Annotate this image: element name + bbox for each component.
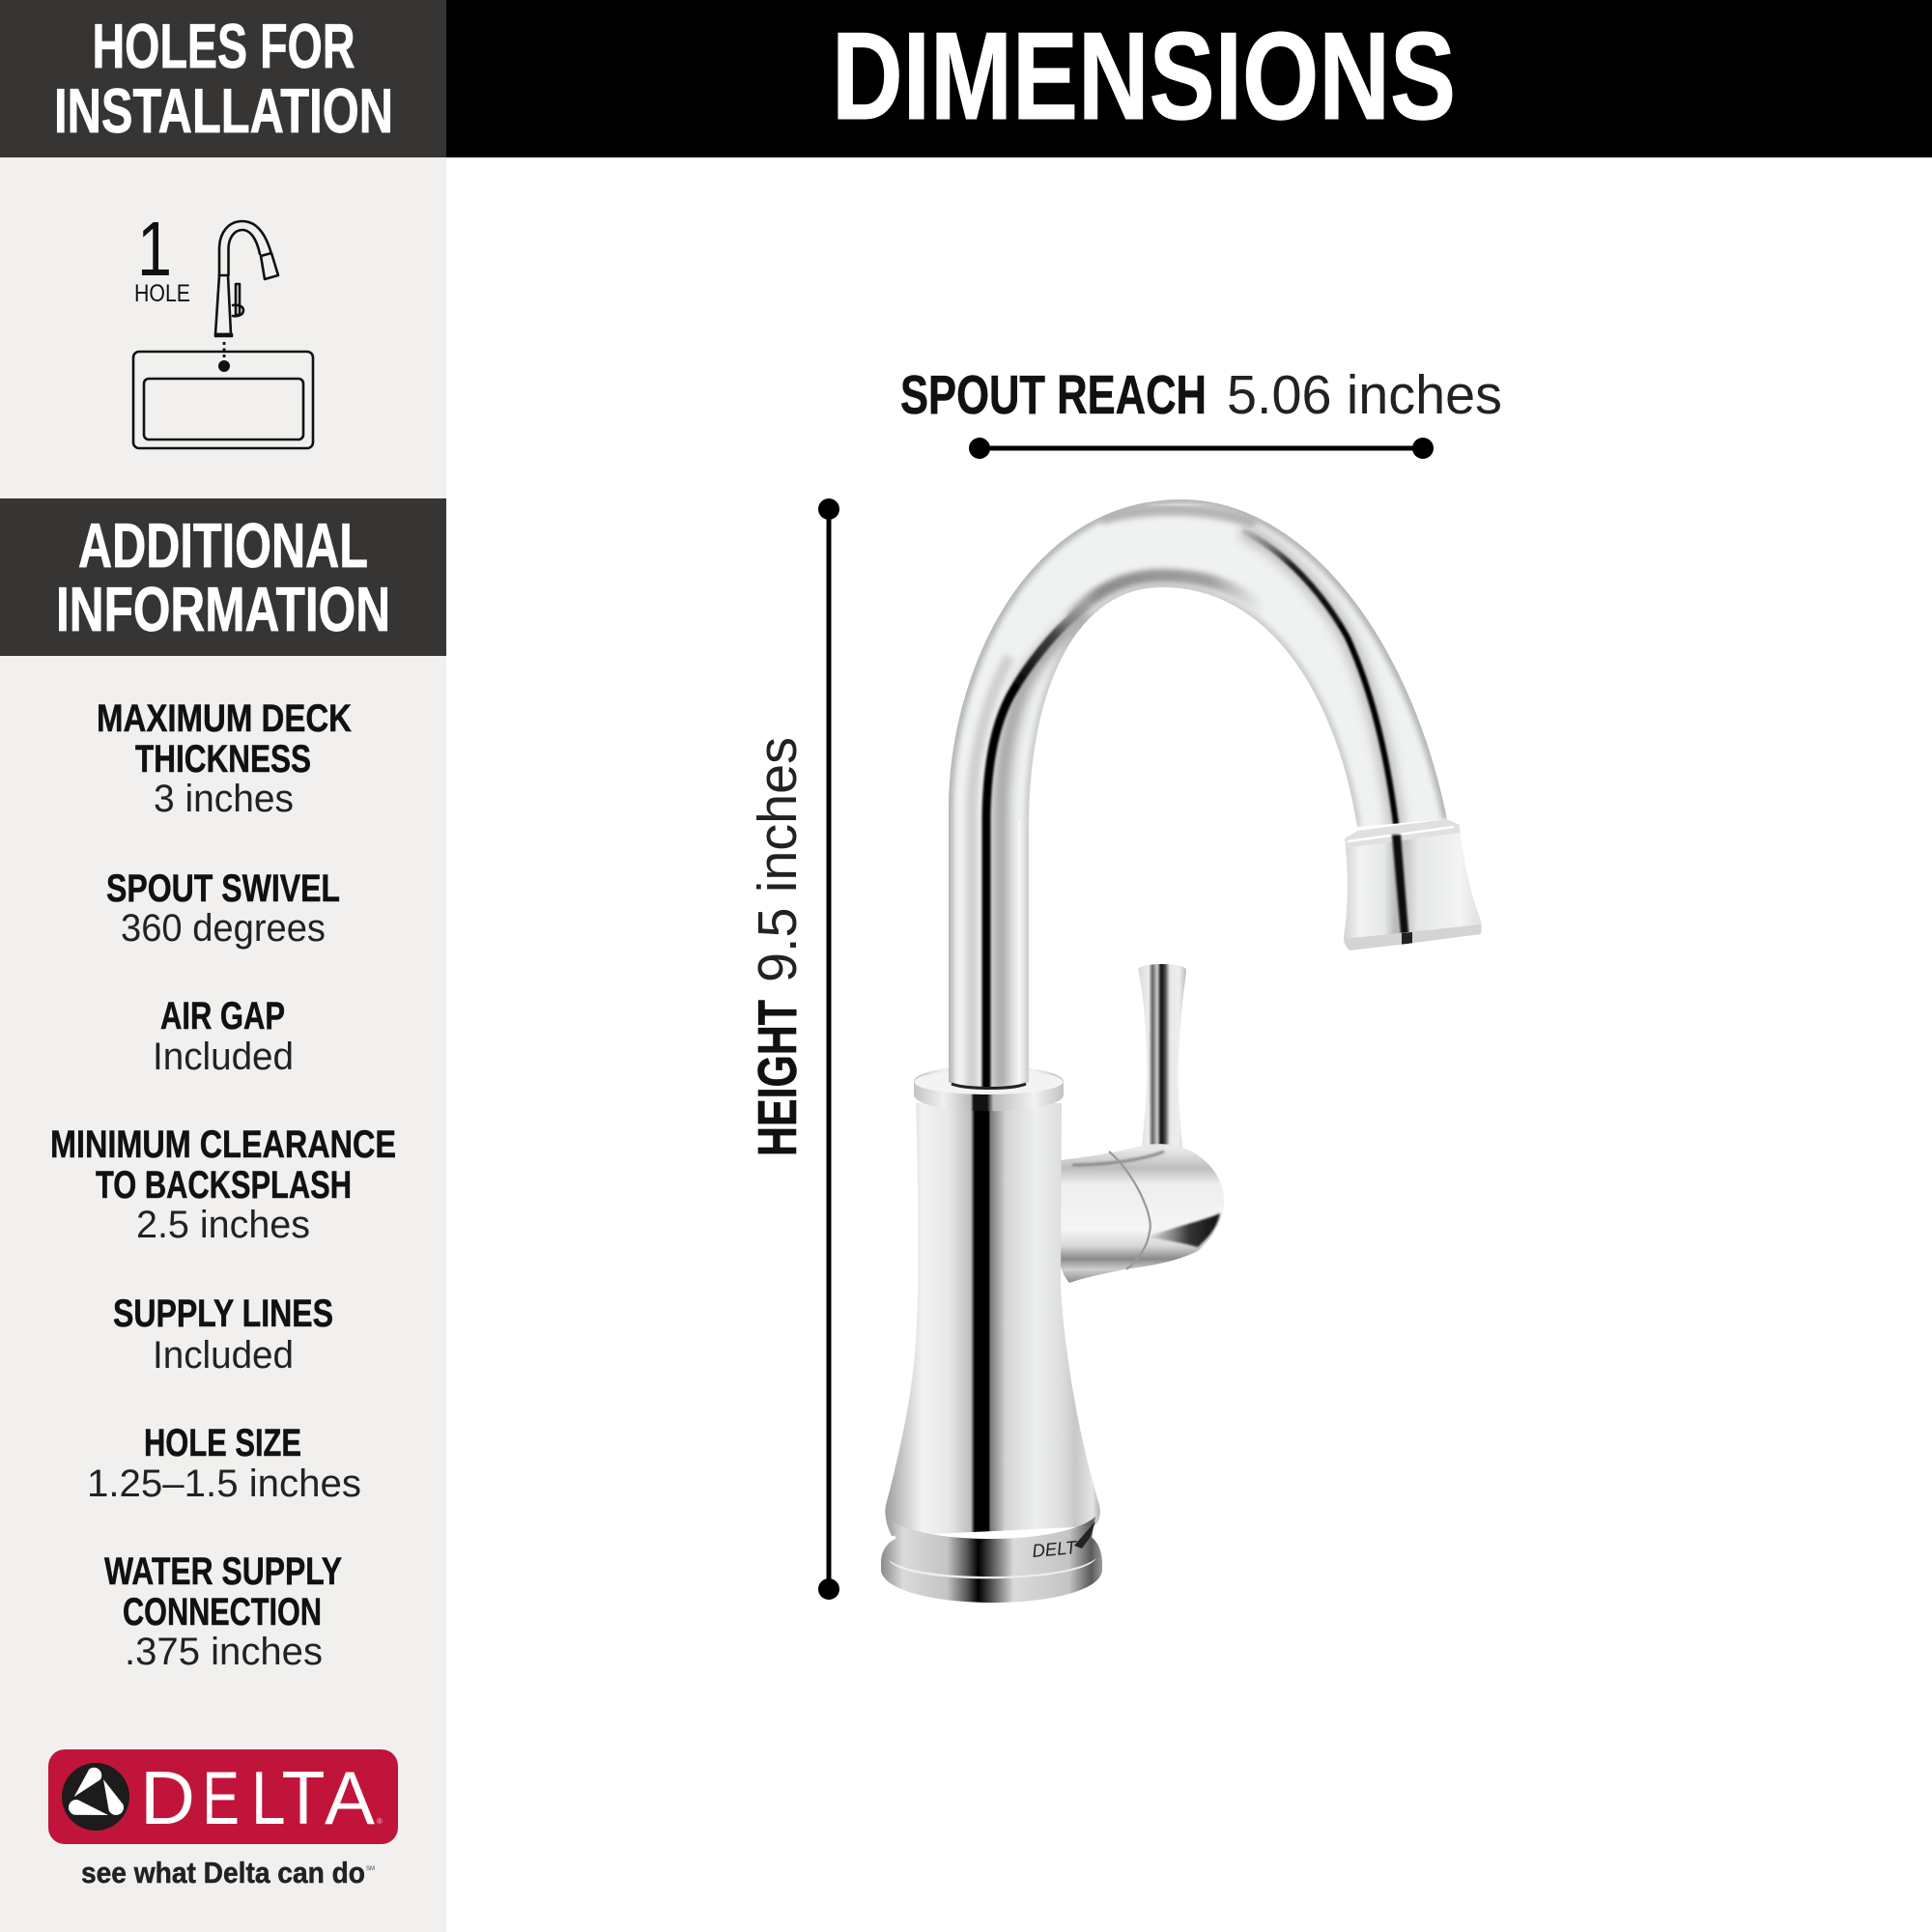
label: height: 9.5 inches <box>747 737 809 982</box>
faucet: lever handle <box>1138 964 1186 1150</box>
text block: minimum clearance to backsplash <box>50 1123 396 1246</box>
faucet: base plate <box>881 1536 1102 1603</box>
logo: delta <box>48 1749 398 1889</box>
heading: holes for installation: INSTALLATION <box>54 75 393 146</box>
text block: supply lines <box>113 1293 333 1377</box>
text block: minimum clearance to backsplash: TO BACKSPLASH <box>96 1164 352 1207</box>
icon: sink outline <box>133 352 313 448</box>
faucet: collar ring <box>914 1066 1064 1111</box>
text block: hole size: HOLE SIZE <box>144 1422 301 1464</box>
text block: spout swivel: SPOUT SWIVEL <box>106 867 340 910</box>
faucet: lever body <box>1057 1144 1224 1283</box>
icon: one hole faucet and sink <box>133 206 313 448</box>
text: service mark: SM <box>366 1866 375 1872</box>
logo: wordmark: L <box>251 1755 286 1840</box>
text block: air gap <box>153 995 294 1078</box>
logo: wordmark: E <box>202 1755 240 1840</box>
text block: minimum clearance to backsplash: 2.5 inches <box>136 1204 310 1246</box>
text: tagline: see what Delta can do <box>81 1856 365 1889</box>
text block: air gap: Included <box>153 1036 294 1078</box>
panel: left sidebar background <box>0 0 446 1932</box>
heading: holes for installation: HOLES FOR <box>93 11 355 81</box>
logo: wordmark <box>140 1755 375 1840</box>
logo: red plate <box>48 1749 398 1844</box>
logo: wordmark: A <box>325 1755 375 1840</box>
text block: maximum deck thickness: MAXIMUM DECK <box>97 697 352 740</box>
text block: supply lines: Included <box>153 1334 294 1377</box>
arrow: height dimension line <box>818 498 839 1600</box>
text block: minimum clearance to backsplash: MINIMUM CLEARANCE <box>50 1123 396 1166</box>
icon: small faucet outline <box>215 221 278 336</box>
text block: hole size <box>87 1422 361 1505</box>
text block: water supply connection <box>104 1550 342 1673</box>
label: spout reach: SPOUT REACH <box>900 364 1207 426</box>
label: spout reach: 5.06 inches <box>1227 364 1502 426</box>
label: height <box>747 737 809 1156</box>
heading: dimensions banner <box>446 0 1932 157</box>
text block: spout swivel <box>106 867 340 950</box>
text block: supply lines: SUPPLY LINES <box>113 1293 333 1335</box>
arrow: spout reach dimension line <box>969 438 1434 459</box>
image: chrome faucet <box>881 483 1488 1603</box>
text: hole count: 1 <box>137 206 172 292</box>
heading: additional information: ADDITIONAL <box>78 510 368 581</box>
icon: dotted hole connector <box>223 342 225 361</box>
text block: maximum deck thickness <box>97 697 352 820</box>
heading: holes for installation <box>0 0 446 157</box>
faucet: spout head <box>1344 819 1482 951</box>
heading: additional information <box>0 498 446 656</box>
label: height: HEIGHT <box>747 1000 809 1156</box>
text: faucet engraved brand: DELT <box>1032 1538 1079 1562</box>
faucet: flared body <box>885 1103 1100 1536</box>
logo: wordmark: T <box>282 1755 325 1840</box>
faucet: base ring <box>892 1517 1095 1562</box>
text block: maximum deck thickness: 3 inches <box>154 778 294 820</box>
logo: wordmark: D <box>140 1755 195 1840</box>
heading: dimensions banner: DIMENSIONS <box>832 7 1456 146</box>
icon: hole dot <box>218 360 230 372</box>
text block: water supply connection: WATER SUPPLY <box>104 1550 342 1593</box>
logo: registered mark: ® <box>377 1817 383 1826</box>
text block: hole size: 1.25–1.5 inches <box>87 1463 361 1505</box>
text: hole label: HOLE <box>134 280 190 307</box>
text block: water supply connection: CONNECTION <box>123 1591 322 1634</box>
faucet: spout tube <box>949 499 1447 1087</box>
text block: maximum deck thickness: THICKNESS <box>135 738 311 781</box>
faucet: brand wedge <box>1074 1521 1095 1548</box>
logo: triangle emblem <box>62 1763 129 1831</box>
text block: spout swivel: 360 degrees <box>121 907 326 950</box>
label: spout reach <box>900 364 1502 426</box>
text block: air gap: AIR GAP <box>160 995 285 1037</box>
faucet: tube socket shadow <box>952 1084 1026 1088</box>
text block: water supply connection: .375 inches <box>125 1631 323 1673</box>
heading: additional information: INFORMATION <box>56 574 390 644</box>
